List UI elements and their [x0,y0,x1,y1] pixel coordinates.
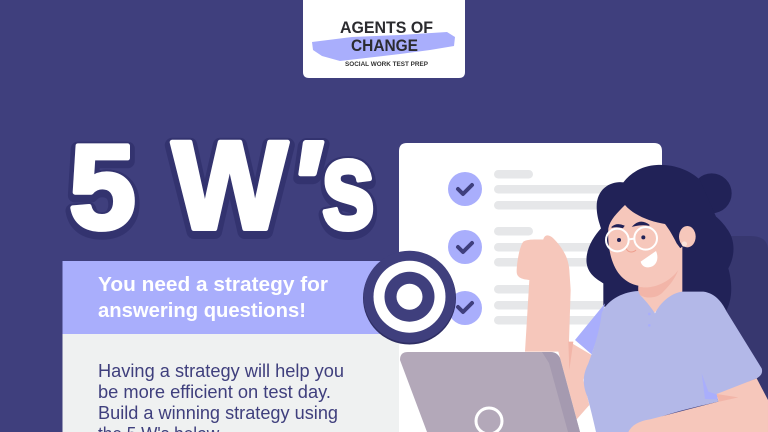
panel: strategy body text: be more efficient on test day. [98,382,331,402]
checklist card [399,143,662,432]
logo card [303,0,465,78]
check item 2 [448,227,620,266]
illustration: woman with laptop [517,165,768,432]
laptop [400,352,580,432]
title: ' [277,119,334,258]
raised arm and fist [517,235,592,419]
check item 1 [448,170,620,210]
ear [679,226,696,247]
panel: strategy body text: Having a strategy will help you [98,361,344,381]
shirt [584,291,762,432]
laptop side [542,352,580,432]
title: s [321,116,375,255]
left sleeve [575,303,605,354]
check item 3 [448,285,620,325]
laptop logo [476,408,502,432]
hair [586,165,734,310]
title: W [172,119,288,259]
neck shadow [638,270,678,297]
panel: strategy body text: Build a winning strategy using [98,403,338,423]
eyebrows [612,222,649,228]
title: W [172,116,288,256]
title [69,116,375,259]
panel: strategy heading: You need a strategy for [98,274,328,296]
lower arm crease [717,394,738,402]
shirt buttons [648,313,651,327]
panel: strategy heading [62,261,399,334]
eyes [617,235,645,242]
icon: target [363,251,456,344]
lower arm [628,378,768,432]
right dark backdrop shape [700,236,768,432]
title: ' [277,116,334,255]
glasses [606,227,657,251]
panel: strategy heading: answering questions! [98,300,306,322]
face [608,205,682,286]
title: s [321,119,375,258]
title: 5 [69,121,136,255]
title: 5 [69,124,136,258]
logo card: AGENTS OF [340,18,433,37]
panel: strategy body text [62,334,399,432]
logo card: SOCIAL WORK TEST PREP [345,62,428,68]
nose [626,240,636,252]
mouth [641,251,657,267]
arm crease [568,342,573,370]
sleeve fold [702,373,718,399]
neck [638,247,682,313]
logo card: CHANGE [351,36,418,55]
